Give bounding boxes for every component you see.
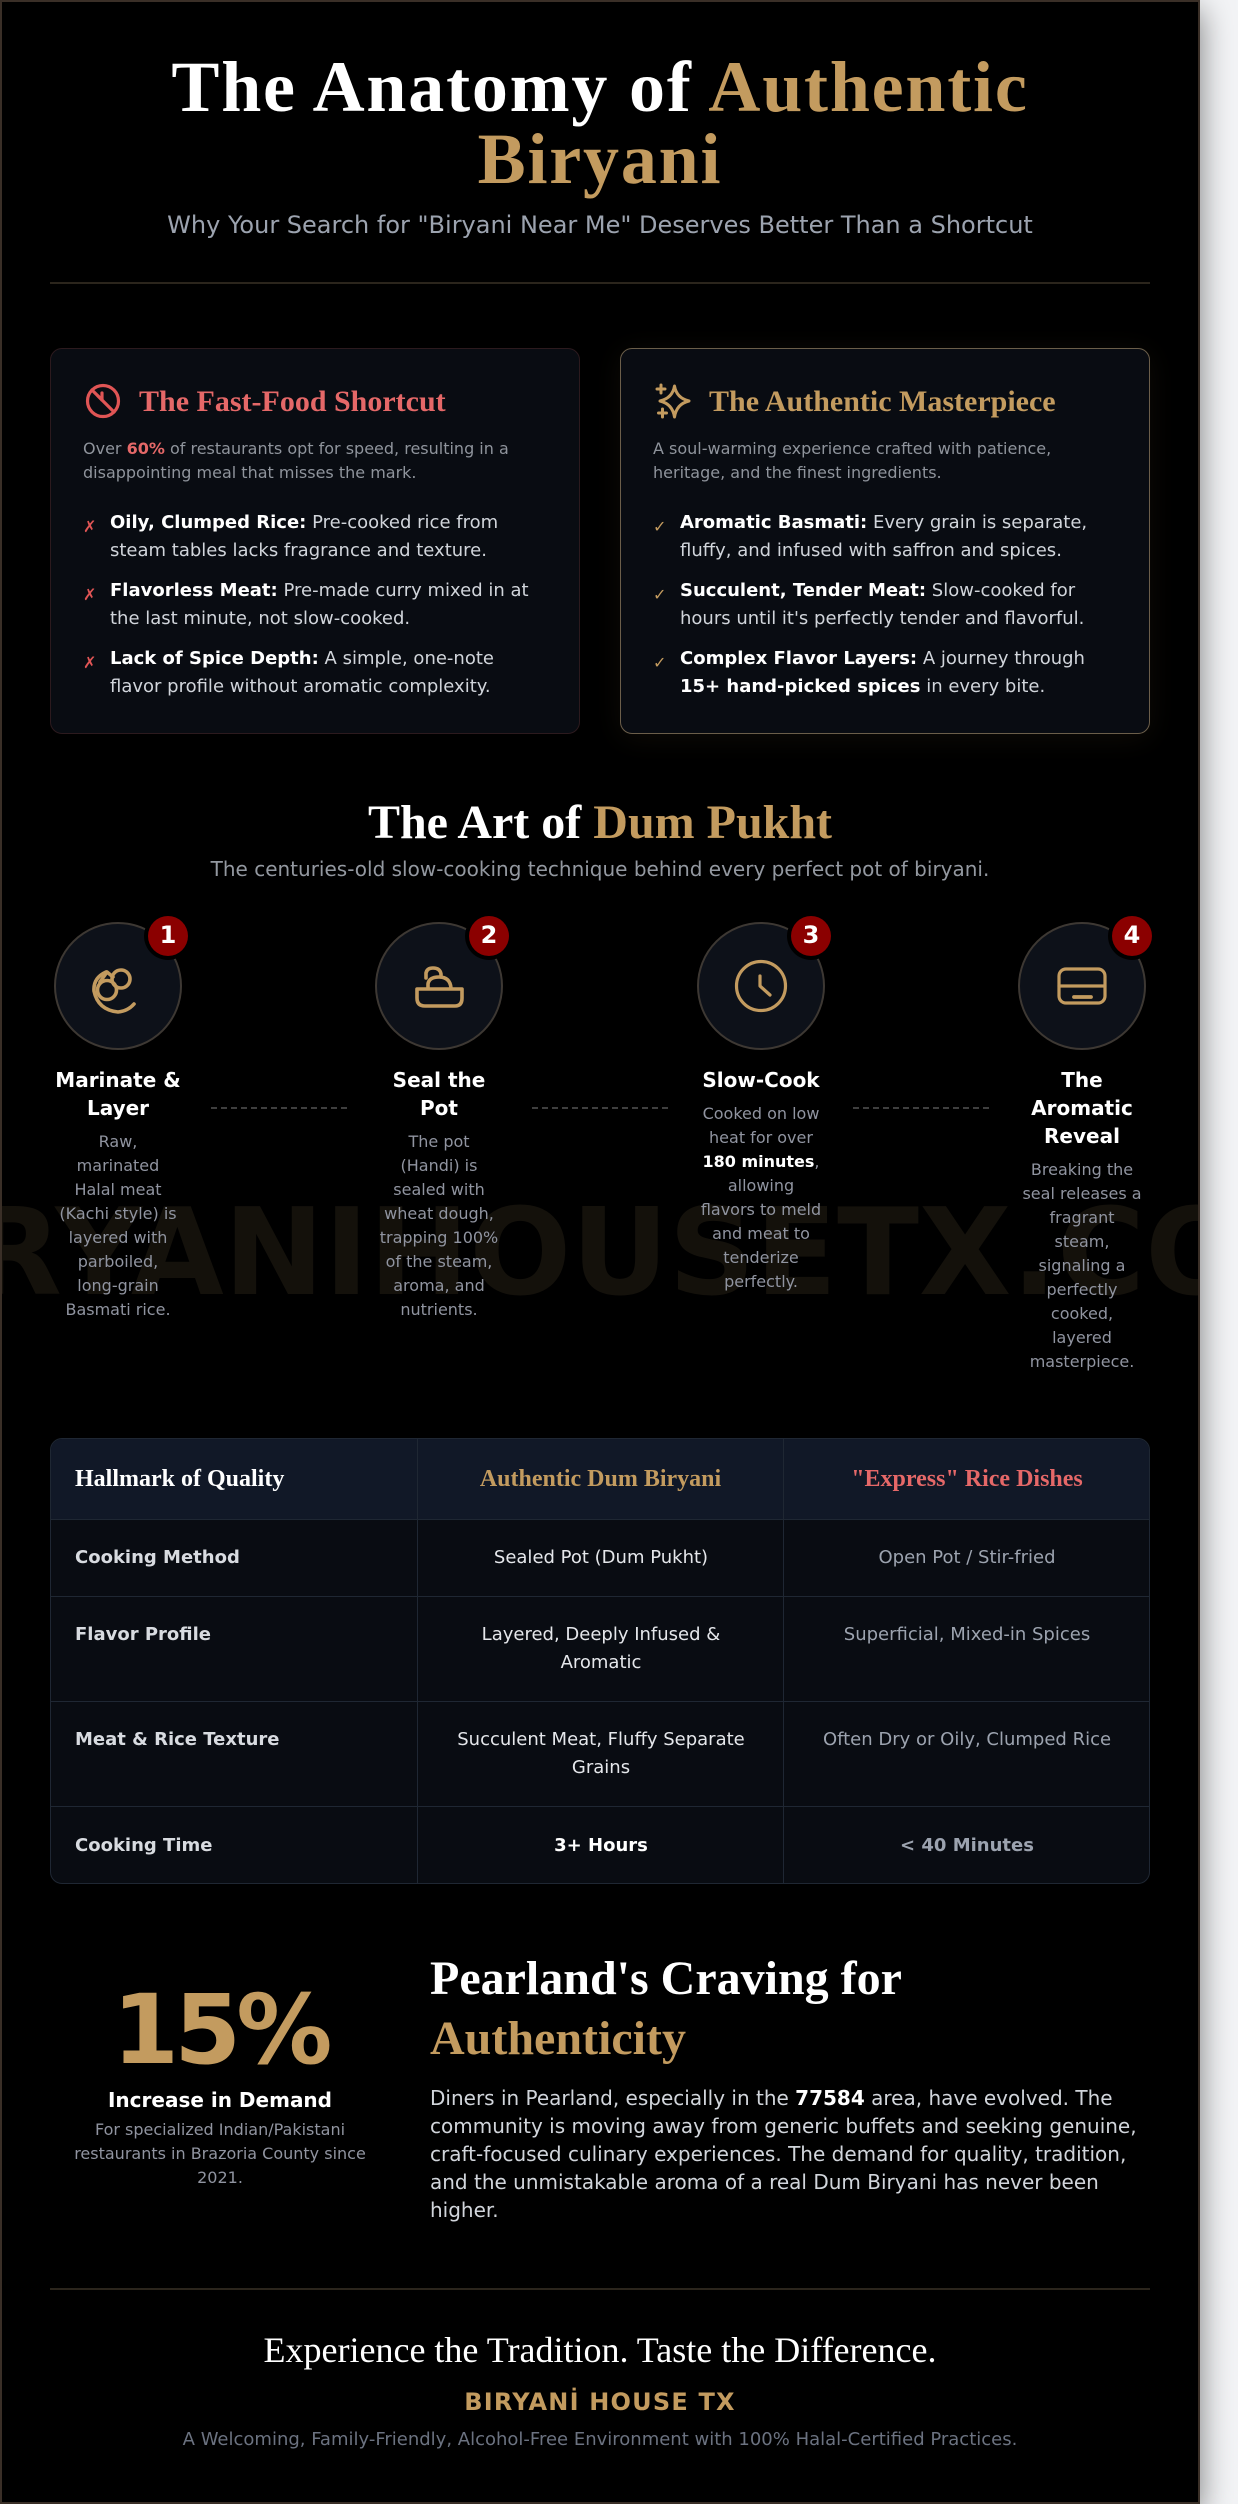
marker: check 3: ✓ (653, 652, 666, 672)
step badge 2 (469, 916, 509, 956)
list item: meat (110, 580, 529, 629)
icon: sparkles (656, 384, 690, 418)
stat description: 2021. (197, 2168, 243, 2187)
list item: flavor layers (680, 648, 1085, 697)
list item: flavor layers: Complex Flavor Layers: A journey through (680, 648, 1085, 669)
step 3 text: flavors to meld (701, 1200, 821, 1219)
step 3 circle (697, 922, 825, 1050)
panel: fast-food shortcut (50, 348, 580, 734)
step 4 text: masterpiece. (1030, 1352, 1134, 1371)
step badge 1 (148, 916, 188, 956)
step 1 title: Marinate & (55, 1068, 181, 1092)
table header: hallmark: Hallmark of Quality (75, 1466, 284, 1492)
step 4 text: seal releases a (1022, 1184, 1142, 1203)
step 4 text: steam, (1055, 1232, 1109, 1251)
step 3 text: tenderize (723, 1248, 799, 1267)
icon: no fast food (86, 384, 120, 418)
marker: check 1: ✓ (653, 516, 666, 536)
list item: basmati: fluffy, and infused with saffron and spices. (680, 540, 1062, 561)
cell: layered (482, 1624, 720, 1673)
step 4 text: Breaking the (1031, 1160, 1133, 1179)
row label: cooking time: Cooking Time (75, 1834, 212, 1856)
list item: tender meat: Succulent, Tender Meat: Slow-cooked for (680, 580, 1075, 601)
cell: layered: Layered, Deeply Infused & (482, 1624, 720, 1645)
step 4 title: The (1061, 1068, 1103, 1092)
footer brand: BIRYANİ HOUSE TX (464, 2388, 736, 2416)
heading: pearland (430, 1952, 902, 2064)
step 2 text (380, 1132, 498, 1319)
table header: authentic: Authentic Dum Biryani (480, 1466, 721, 1492)
marker: cross 3: ✗ (83, 652, 96, 672)
icon: sealed pot (415, 966, 464, 1008)
step 2 text: aroma, and (393, 1276, 485, 1295)
marker: cross 2: ✗ (83, 584, 96, 604)
text: shortcut description: Over 60% of restaurants opt for speed, resulting in a (83, 438, 509, 458)
step 4 text: cooked, (1051, 1304, 1113, 1323)
heading: pearland: Authenticity (430, 2012, 686, 2064)
icon: marinate (92, 968, 136, 1014)
icon: aromatic reveal (1057, 967, 1107, 1005)
step badge 4: 4 (1124, 921, 1140, 949)
cell: 3+ hours: 3+ Hours (554, 1834, 648, 1856)
cell: superficial: Superficial, Mixed-in Spices (844, 1624, 1090, 1645)
marker: check 2: ✓ (653, 584, 666, 604)
footer note: A Welcoming, Family-Friendly, Alcohol-Free Environment with 100% Halal-Certified Practices. (183, 2429, 1017, 2450)
title: Biryani (478, 119, 722, 199)
step 4 title: Reveal (1044, 1124, 1120, 1148)
step 2 text: (Handi) is (401, 1156, 477, 1175)
text: shortcut description: disappointing meal that misses the mark. (83, 463, 417, 482)
cell: succulent (457, 1729, 745, 1778)
stat description: restaurants in Brazoria County since (74, 2144, 366, 2163)
step 1 text: Basmati rice. (65, 1300, 171, 1319)
step 3 text (701, 1104, 821, 1291)
row label: flavor profile: Flavor Profile (75, 1624, 211, 1645)
row label: cooking method: Cooking Method (75, 1547, 240, 1568)
subtitle: dum pukht: The centuries-old slow-cooking technique behind every perfect pot of biryani. (211, 857, 989, 881)
step 2 text: wheat dough, (384, 1204, 494, 1223)
step 4 title (1031, 1068, 1133, 1148)
step 4 circle (1018, 922, 1146, 1050)
step 1 text: Raw, (99, 1132, 137, 1151)
step badge 4 (1112, 916, 1152, 956)
icon: clock (734, 960, 788, 1012)
cell: open pot: Open Pot / Stir-fried (878, 1547, 1056, 1568)
step 4 text: layered (1052, 1328, 1112, 1347)
heading: pearland: Pearland's Craving for (430, 1952, 902, 2004)
step badge 3: 3 (803, 921, 819, 949)
text: masterpiece description (653, 438, 1051, 482)
step 1 text: (Kachi style) is (59, 1204, 177, 1223)
list item: meat: Flavorless Meat: Pre-made curry mixed in at (110, 580, 529, 601)
step badge 3 (791, 916, 831, 956)
step 2 text: nutrients. (400, 1300, 478, 1319)
step 2 title: Pot (420, 1096, 458, 1120)
step 4 title: Aromatic (1031, 1096, 1133, 1120)
list item: tender meat (680, 580, 1084, 629)
step 3 text: 180 minutes, (702, 1152, 820, 1171)
cell: dry: Often Dry or Oily, Clumped Rice (823, 1729, 1111, 1750)
step 2 title: Seal the (393, 1068, 485, 1092)
step 1 title: Layer (87, 1096, 149, 1120)
list item: spice: flavor profile without aromatic complexity. (110, 676, 491, 697)
step 3 text: and meat to (712, 1224, 810, 1243)
body text: pearland: Diners in Pearland, especially in the 77584 area, have evolved. The (430, 2086, 1113, 2110)
step 2 title (393, 1068, 485, 1120)
title: The Anatomy of Authentic (171, 47, 1029, 127)
cell: 40 minutes: < 40 Minutes (900, 1834, 1034, 1856)
step 2 circle (375, 922, 503, 1050)
text: shortcut description (83, 438, 509, 482)
step 3 text: perfectly. (724, 1272, 798, 1291)
list item: basmati (680, 512, 1087, 561)
list item: rice: Oily, Clumped Rice: Pre-cooked rice from (110, 512, 498, 533)
step 1 text: long-grain (77, 1276, 159, 1295)
step 4 text: fragrant (1050, 1208, 1114, 1227)
body text: pearland: craft-focused culinary experiences. The demand for quality, tradition, (430, 2142, 1126, 2166)
step 3 text: heat for over (709, 1128, 813, 1147)
table header: express: "Express" Rice Dishes (851, 1466, 1083, 1492)
cell: sealed pot: Sealed Pot (Dum Pukht) (494, 1547, 708, 1568)
step 3 text: Cooked on low (703, 1104, 819, 1123)
stat: 15 percent: 15% (112, 1974, 328, 2086)
step 3 text: allowing (728, 1176, 794, 1195)
cell: succulent: Succulent Meat, Fluffy Separate (457, 1729, 745, 1750)
step 4 text (1022, 1160, 1142, 1371)
list item: spice: Lack of Spice Depth: A simple, one-note (110, 648, 494, 669)
step 1 text: Halal meat (74, 1180, 162, 1199)
text: masterpiece description: heritage, and the finest ingredients. (653, 463, 942, 482)
stat description (74, 2120, 366, 2187)
list item: rice: steam tables lacks fragrance and texture. (110, 540, 487, 561)
list item: spice (110, 648, 494, 697)
heading: authentic masterpiece: The Authentic Masterpiece (709, 385, 1056, 418)
list item: rice (110, 512, 498, 561)
step 1 title (55, 1068, 181, 1120)
step 2 text: of the steam, (386, 1252, 492, 1271)
step 4 text: signaling a (1039, 1256, 1125, 1275)
step 4 text: perfectly (1046, 1280, 1118, 1299)
step 2 text: sealed with (393, 1180, 485, 1199)
step 1 text: layered with (69, 1228, 167, 1247)
body text: pearland (430, 2086, 1137, 2222)
comparison table (50, 1438, 1150, 1884)
heading: fast-food shortcut: The Fast-Food Shortcut (139, 385, 446, 418)
subtitle: Why Your Search for "Biryani Near Me" Deserves Better Than a Shortcut (167, 211, 1033, 239)
heading: dum pukht: The Art of Dum Pukht (368, 796, 832, 849)
step 1 text: marinated (77, 1156, 159, 1175)
row label: texture: Meat & Rice Texture (75, 1729, 280, 1750)
body text: pearland: higher. (430, 2198, 499, 2222)
title (171, 47, 1029, 199)
stat label: Increase in Demand (108, 2088, 332, 2112)
step 3 title: Slow-Cook (702, 1068, 820, 1092)
step badge 1: 1 (160, 921, 176, 949)
list item: flavor layers: 15+ hand-picked spices in every bite. (680, 676, 1045, 697)
list item: meat: the last minute, not slow-cooked. (110, 608, 410, 629)
cell: layered: Aromatic (561, 1652, 641, 1673)
list item: tender meat: hours until it's perfectly tender and flavorful. (680, 608, 1084, 629)
step 1 text: parboiled, (78, 1252, 158, 1271)
text: masterpiece description: A soul-warming experience crafted with patience, (653, 438, 1051, 458)
step 2 text: trapping 100% (380, 1228, 498, 1247)
step 2 text: The pot (408, 1132, 470, 1151)
step badge 2: 2 (481, 921, 497, 949)
step 1 text (59, 1132, 177, 1319)
panel: authentic masterpiece (620, 348, 1150, 734)
footer tagline: Experience the Tradition. Taste the Difference. (264, 2330, 936, 2370)
list item: basmati: Aromatic Basmati: Every grain is separate, (680, 512, 1087, 533)
body text: pearland: community is moving away from generic buffets and seeking genuine, (430, 2114, 1137, 2138)
cell: succulent: Grains (572, 1757, 630, 1778)
stat description: For specialized Indian/Pakistani (95, 2120, 345, 2139)
body text: pearland: and the unmistakable aroma of a real Dum Biryani has never been (430, 2170, 1099, 2194)
step 1 circle (54, 922, 182, 1050)
marker: cross 1: ✗ (83, 516, 96, 536)
